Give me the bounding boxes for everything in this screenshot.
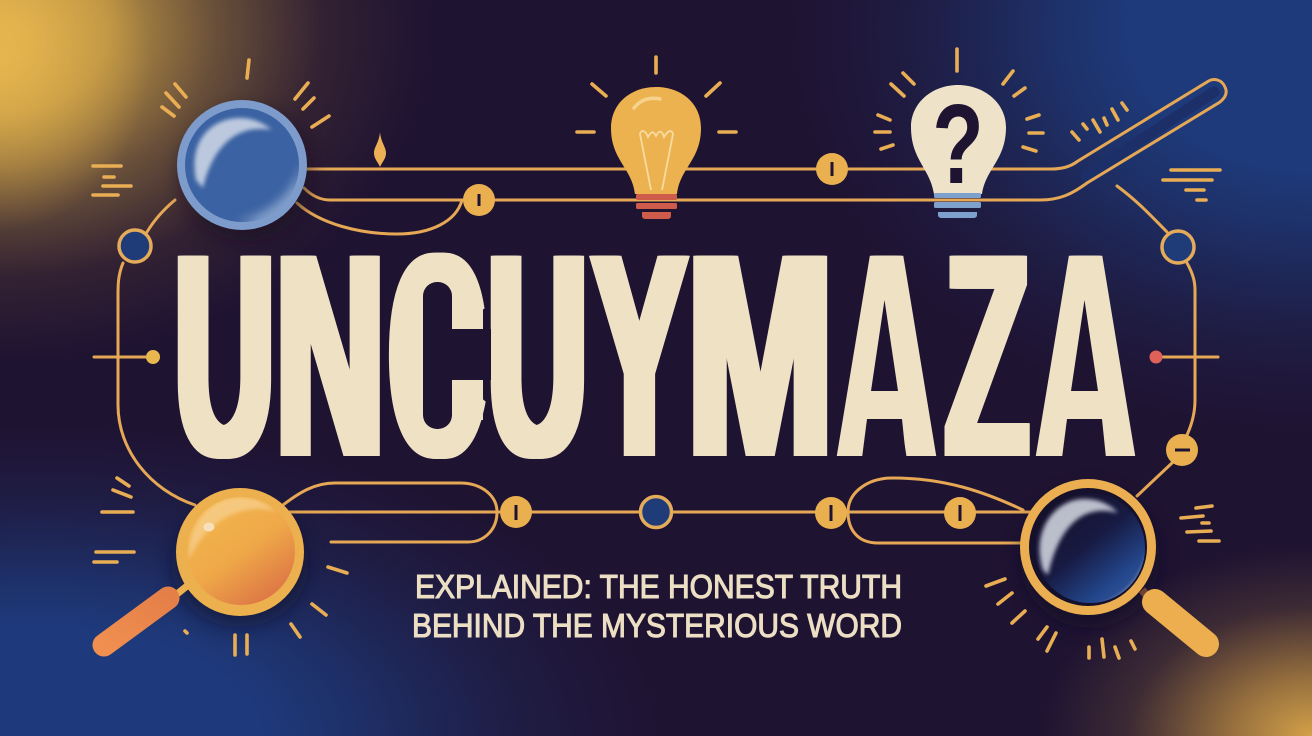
title: C xyxy=(389,193,484,518)
marker dot: right xyxy=(1150,350,1162,364)
rays: orange magnifier xyxy=(94,478,347,655)
dashes: top right xyxy=(1163,170,1220,200)
icon: dark magnifier xyxy=(1020,484,1206,644)
subtitle: BEHIND THE MYSTERIOUS WORD xyxy=(412,607,902,644)
title: A xyxy=(1038,193,1133,518)
node: lower right xyxy=(944,497,976,529)
node: upper left xyxy=(463,184,495,216)
icon: blue orb xyxy=(177,100,312,241)
title: Z xyxy=(946,193,1028,518)
node: lower centre right xyxy=(815,497,847,529)
title: Y xyxy=(592,193,686,518)
tube fill: top right xyxy=(1086,92,1214,176)
icon: orange magnifier xyxy=(104,488,308,645)
question mark: ? xyxy=(932,82,984,208)
title xyxy=(175,193,1136,518)
left side connector xyxy=(94,263,195,505)
rays: yellow bulb xyxy=(577,57,736,132)
node: lower left xyxy=(500,496,532,528)
icon: small flame marker xyxy=(374,132,386,167)
title: M xyxy=(687,193,833,518)
lower connector lines xyxy=(283,478,1030,543)
rays: blue orb xyxy=(93,60,329,195)
rays: dark magnifier xyxy=(986,506,1219,658)
node: minus xyxy=(1166,434,1198,466)
title: U xyxy=(488,193,587,518)
icon: yellow light bulb xyxy=(611,87,701,219)
node: navy left xyxy=(119,230,151,262)
title: N xyxy=(276,193,385,518)
marker dot: left xyxy=(146,350,160,364)
upper connector lines xyxy=(147,80,1226,234)
title: U xyxy=(175,193,274,518)
right side connector xyxy=(1137,263,1218,496)
node: navy centre xyxy=(640,496,672,528)
rays: question bulb xyxy=(875,49,1043,151)
node: top line xyxy=(816,153,848,185)
node: navy right xyxy=(1162,231,1194,263)
subtitle xyxy=(412,568,902,644)
tick marks: top right xyxy=(1072,103,1127,140)
title: A xyxy=(838,193,934,518)
icon: question-mark bulb xyxy=(911,82,1006,218)
subtitle: EXPLAINED: THE HONEST TRUTH xyxy=(415,568,902,605)
